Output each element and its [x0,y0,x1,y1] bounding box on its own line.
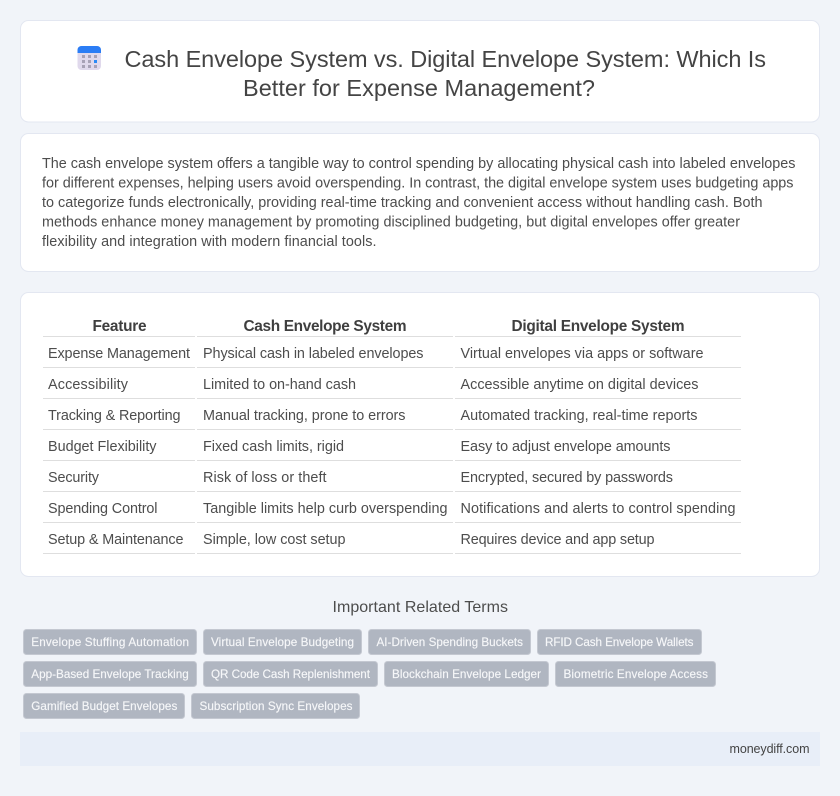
table row: Accessibility [43,377,741,399]
tag: Envelope Stuffing Automation: Envelope Stuffing Automation [31,636,189,649]
table row: Tracking & Reporting: Automated tracking, real-time reports [460,408,698,424]
text block: introduction paragraph: to categorize funds electronically, providing real-time tracking and convenient access without handling cash. Both [42,195,762,211]
tag: Blockchain Envelope Ledger [384,662,548,686]
table row: Security: Security [48,470,100,486]
table row: Budget Flexibility: Easy to adjust envelope amounts [460,439,670,455]
text block: introduction paragraph: The cash envelope system offers a tangible way to control spending by allocating physical cash into labeled envelopes [42,156,796,172]
panel: comparison table [20,292,820,576]
tag: AI-Driven Spending Buckets [368,630,530,654]
table row: Accessibility: Limited to on-hand cash [203,377,356,393]
table row: Budget Flexibility: Budget Flexibility [48,439,157,455]
table row: Expense Management [43,346,741,368]
tag: Subscription Sync Envelopes: Subscription Sync Envelopes [200,700,353,713]
tag: AI-Driven Spending Buckets: AI-Driven Spending Buckets [376,636,523,649]
heading: important related terms: Important Related Terms [332,599,508,616]
table row: Accessibility: Accessible anytime on digital devices [460,377,698,393]
table header [43,318,741,337]
tag: Virtual Envelope Budgeting [204,630,362,654]
text block: introduction paragraph [42,156,796,250]
tag: Virtual Envelope Budgeting: Virtual Envelope Budgeting [211,636,354,649]
table row: Tracking & Reporting: Tracking & Reporting [48,408,180,424]
table row: Tracking & Reporting [43,408,741,430]
tag: RFID Cash Envelope Wallets: RFID Cash Envelope Wallets [545,636,694,649]
table row: Spending Control: Spending Control [48,501,158,517]
table header: Feature [92,318,147,335]
table row: Expense Management: Virtual envelopes via apps or software [460,346,704,362]
footer [20,732,820,766]
title: Cash Envelope System vs. Digital Envelope System: Which Is [124,46,766,72]
table row: Expense Management: Physical cash in labeled envelopes [203,346,424,362]
tag: Gamified Budget Envelopes [24,694,184,718]
tag: Biometric Envelope Access: Biometric Envelope Access [564,668,708,681]
table row: Security: Encrypted, secured by passwords [460,470,673,486]
table row: Setup & Maintenance: Requires device and app setup [460,532,654,548]
table row: Spending Control: Notifications and alerts to control spending [460,501,736,517]
tag: QR Code Cash Replenishment [204,662,378,686]
table row: Security: Risk of loss or theft [203,470,326,486]
table row: Setup & Maintenance [43,532,741,554]
panel: related term tags [24,630,716,718]
table row: Spending Control [43,501,741,523]
title [124,46,766,101]
tag: Gamified Budget Envelopes: Gamified Budget Envelopes [31,700,177,713]
table row: Expense Management: Expense Management [48,346,190,362]
footer: moneydiff.com [730,742,810,756]
tag: Subscription Sync Envelopes [192,694,360,718]
table row: Tracking & Reporting: Manual tracking, prone to errors [203,408,406,424]
text block: introduction paragraph: for different expenses, helping users avoid overspending. In contrast, the digital envelope system uses budgeting apps [42,176,794,192]
title: Better for Expense Management? [243,75,595,101]
table row: Setup & Maintenance: Setup & Maintenance [48,532,184,548]
table header: Digital Envelope System [512,318,684,335]
table row: Setup & Maintenance: Simple, low cost setup [203,532,346,548]
tag: QR Code Cash Replenishment: QR Code Cash Replenishment [211,668,371,681]
panel: header [20,20,820,122]
table header: Cash Envelope System [244,318,406,335]
tag: App-Based Envelope Tracking: App-Based Envelope Tracking [31,668,189,681]
text block: introduction paragraph: methods enhance money management by promoting disciplined budgeting, but digital envelopes offer greater [42,214,740,230]
tag: Blockchain Envelope Ledger: Blockchain Envelope Ledger [392,668,541,681]
table row: Budget Flexibility [43,439,741,461]
icon: calendar [78,46,101,70]
text block: introduction paragraph: flexibility and integration with modern financial tools. [42,234,376,250]
table row: Security [43,470,741,492]
tag: RFID Cash Envelope Wallets [538,630,702,654]
tag: Envelope Stuffing Automation [24,630,196,654]
table row: Accessibility: Accessibility [48,377,129,393]
panel: introduction [20,134,820,272]
tag: Biometric Envelope Access [556,662,716,686]
table row: Budget Flexibility: Fixed cash limits, rigid [203,439,344,455]
tag: App-Based Envelope Tracking [24,662,196,686]
table row: Spending Control: Tangible limits help curb overspending [203,501,448,517]
